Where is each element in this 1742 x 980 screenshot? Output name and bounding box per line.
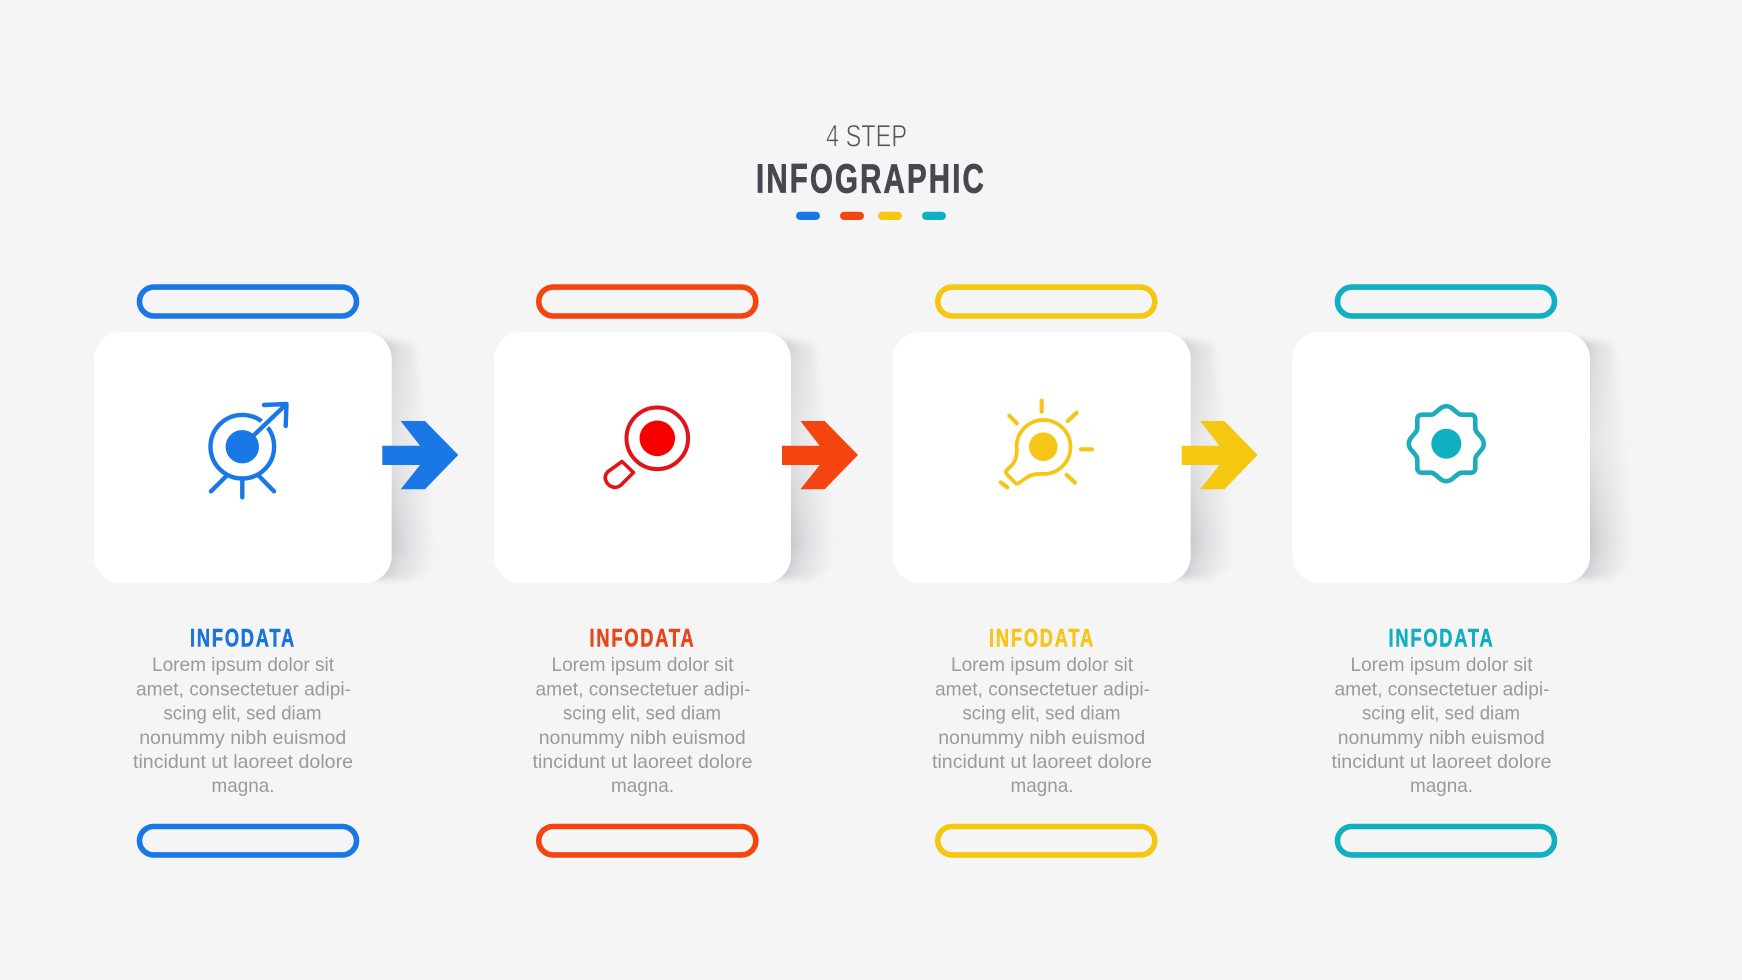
text block 2: magna.: [611, 775, 674, 797]
panel: step 1: [94, 287, 458, 855]
card 3: [893, 332, 1191, 583]
top pill 4: [1338, 287, 1554, 316]
title block: [756, 118, 986, 220]
text block 3: nonummy nibh euismod: [938, 727, 1145, 749]
text block 3: amet, consectetuer adipi-: [935, 678, 1150, 700]
text block 2: Lorem ipsum dolor sit: [552, 654, 734, 676]
subtitle: 4 STEP: 4 STEP: [826, 118, 907, 154]
icon: light bulb: [1001, 401, 1092, 487]
card shadow 2: [775, 336, 824, 582]
card shadow 3: [1174, 336, 1224, 582]
card shadow 4: [1574, 336, 1624, 582]
text block 2: nonummy nibh euismod: [539, 727, 746, 749]
bottom pill 4: [1338, 826, 1554, 855]
text block 3: [932, 654, 1152, 797]
arrow 2: [782, 421, 858, 489]
text block 3: scing elit, sed diam: [962, 702, 1120, 724]
card 2: [494, 332, 791, 583]
text block 1: magna.: [212, 775, 274, 797]
card 1: [94, 332, 392, 583]
icon: gear badge: [1409, 406, 1484, 481]
text block 4: scing elit, sed diam: [1362, 702, 1520, 724]
colour dashes: [796, 212, 946, 220]
heading: INFOGRAPHIC: INFOGRAPHIC: [756, 156, 986, 202]
text block 1: [133, 654, 353, 797]
label 2: INFODATA: [590, 625, 696, 653]
text block 3: magna.: [1010, 775, 1074, 797]
panel: step 3: [893, 287, 1258, 855]
card shadow 1: [376, 336, 425, 582]
text block 3: Lorem ipsum dolor sit: [951, 654, 1134, 676]
text block 4: tincidunt ut laoreet dolore: [1332, 751, 1552, 773]
text block 4: nonummy nibh euismod: [1338, 727, 1545, 749]
label 1: INFODATA: [190, 625, 296, 653]
top pill 1: [140, 287, 356, 316]
text block 3: tincidunt ut laoreet dolore: [932, 751, 1152, 773]
bottom pill 1: [140, 826, 356, 855]
label 4: INFODATA: [1388, 625, 1494, 653]
top pill 3: [938, 287, 1155, 316]
label 3: INFODATA: [989, 625, 1095, 653]
icon: target with arrow: [210, 404, 286, 497]
text block 2: tincidunt ut laoreet dolore: [532, 751, 752, 773]
icon: magnifier: [605, 408, 688, 487]
text block 2: scing elit, sed diam: [563, 702, 721, 724]
arrow 3: [1182, 421, 1258, 489]
top pill 2: [539, 287, 756, 316]
panel: step 4: [1292, 287, 1634, 855]
text block 1: tincidunt ut laoreet dolore: [133, 751, 353, 773]
bottom pill 2: [539, 826, 756, 855]
bottom pill 3: [938, 826, 1155, 855]
text block 1: scing elit, sed diam: [164, 702, 322, 724]
text block 1: amet, consectetuer adipi-: [136, 678, 351, 700]
panel: step 2: [494, 287, 858, 855]
arrow 1: [382, 421, 458, 489]
text block 4: amet, consectetuer adipi-: [1334, 678, 1550, 700]
text block 4: Lorem ipsum dolor sit: [1350, 654, 1533, 676]
text block 4: magna.: [1410, 775, 1473, 797]
text block 2: [532, 654, 752, 797]
text block 1: nonummy nibh euismod: [139, 727, 346, 749]
card 4: [1292, 332, 1590, 583]
text block 1: Lorem ipsum dolor sit: [152, 654, 335, 676]
text block 2: amet, consectetuer adipi-: [536, 678, 750, 700]
text block 4: [1332, 654, 1552, 797]
